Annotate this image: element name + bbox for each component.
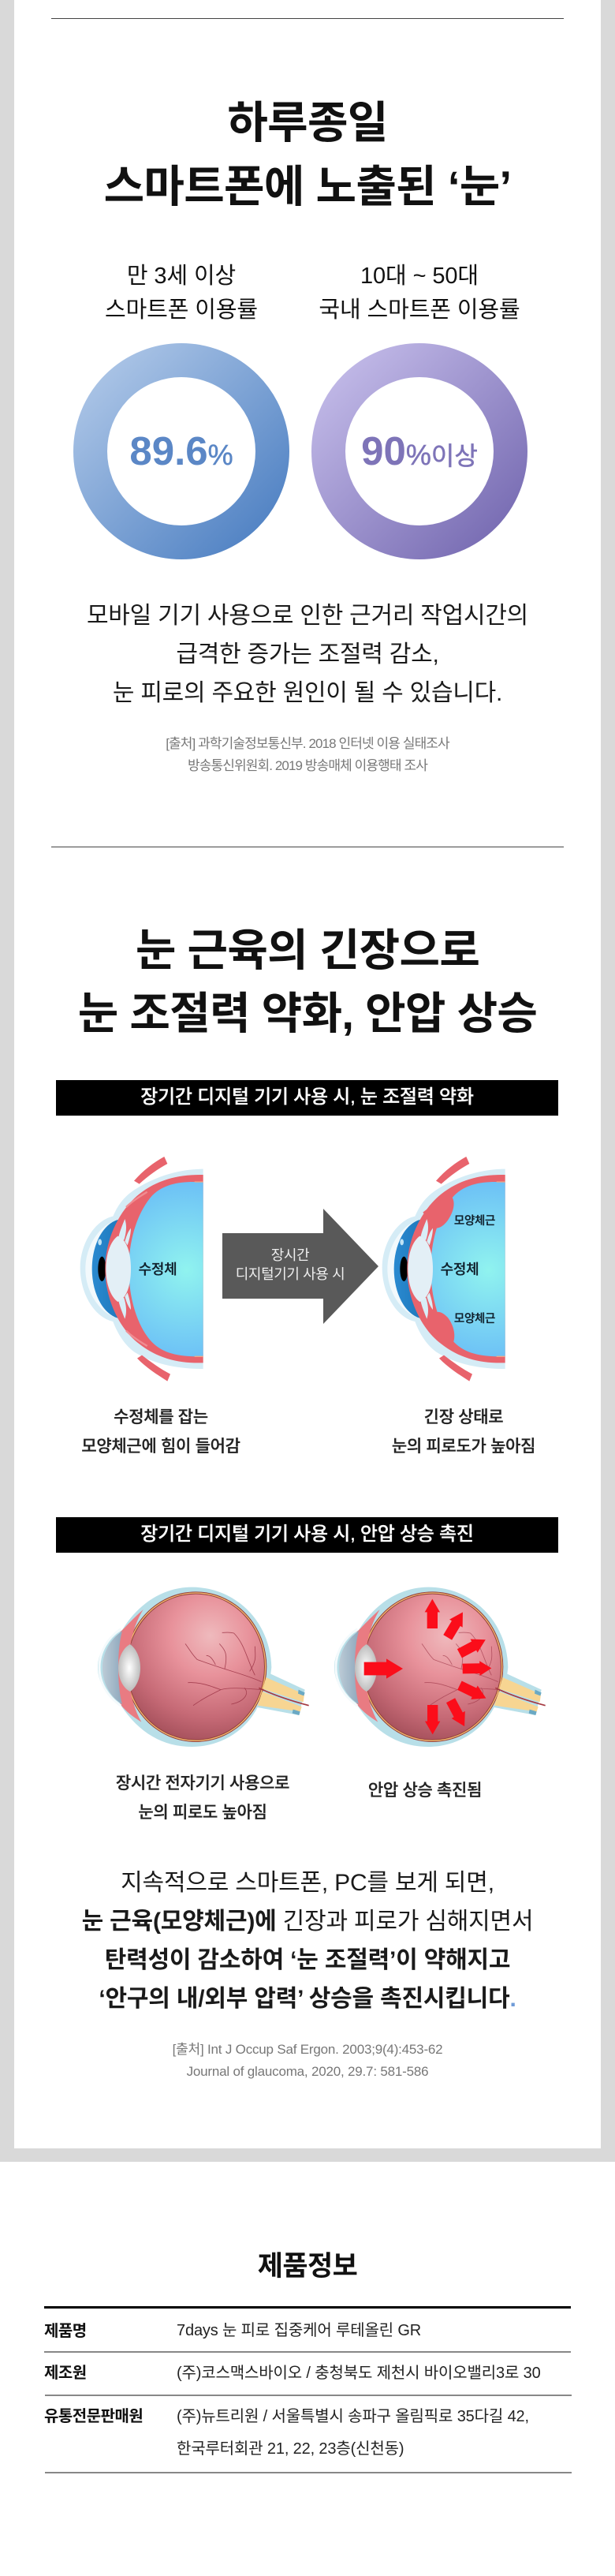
- caption: tension state: 긴장 상태로: [424, 1408, 503, 1426]
- stat label: teens to fifties: [319, 264, 520, 323]
- row value: manufacturer: (주)코스맥스바이오 / 충청북도 제천시 바이오밸리3로 30: [177, 2365, 541, 2382]
- row label: manufacturer: 제조원: [44, 2365, 87, 2382]
- title: all-day smartphone exposure: [104, 98, 511, 211]
- white content card: [14, 0, 601, 2148]
- arrow text: 장시간: [271, 1247, 309, 1263]
- caption: fatigue increases: 눈의 피로도 높아짐: [138, 1804, 267, 1822]
- row value: distributor: 한국루터회관 21, 22, 23층(신천동): [177, 2440, 404, 2458]
- caption: ciliary muscle strain: 모양체근에 힘이 들어감: [81, 1438, 240, 1456]
- donut value 90% or more: 90%이상: [361, 428, 478, 473]
- donut value 89.6%: 89.6%: [129, 428, 233, 473]
- stat label: age 3 and older: 스마트폰 이용률: [105, 297, 258, 323]
- source note 1: [출처] 과학기술정보통신부. 2018 인터넷 이용 실태조사: [166, 736, 449, 751]
- source note 2: [출처] Int J Occup Saf Ergon. 2003;9(4):453-62: [173, 2042, 442, 2057]
- paragraph: mobile use and accommodation: 급격한 증가는 조절력 감소,: [176, 641, 439, 667]
- paragraph: mobile use and accommodation: 모바일 기기 사용으로 인한 근거리 작업시간의: [87, 603, 528, 629]
- stat label: age 3 and older: 만 3세 이상: [127, 264, 236, 289]
- arrow: prolonged digital device use: [222, 1209, 378, 1324]
- row value: distributor: [177, 2408, 529, 2458]
- stat label: teens to fifties: 국내 스마트폰 이용률: [319, 297, 520, 323]
- source note 1: 방송통신위원회. 2019 방송매체 이용행태 조사: [188, 758, 427, 773]
- title: all-day smartphone exposure: 하루종일: [227, 98, 388, 148]
- row value: product name: 7days 눈 피로 집중케어 루테올린 GR: [177, 2322, 421, 2339]
- paragraph: continued screen use: 지속적으로 스마트폰, PC를 보게 되면,: [121, 1870, 494, 1896]
- section bar: intraocular pressure: 장기간 디지털 기기 사용 시, 안압 상승 촉진: [140, 1524, 474, 1545]
- title: all-day smartphone exposure: 스마트폰에 노출된 ‘눈’: [104, 162, 511, 211]
- illustration: relaxed eye cross-section: [80, 1157, 203, 1381]
- paragraph: mobile use and accommodation: 눈 피로의 주요한 원인이 될 수 있습니다.: [113, 680, 502, 706]
- row label: product name: 제품명: [44, 2323, 87, 2340]
- label: ciliary muscle bottom: 모양체근: [454, 1313, 495, 1325]
- source note 2: Journal of glaucoma, 2020, 29.7: 581-586: [187, 2064, 428, 2079]
- table: product information: [44, 2306, 572, 2473]
- caption: tension state: [392, 1408, 535, 1456]
- arrow text: [236, 1247, 345, 1282]
- caption: fatigue increases: 장시간 전자기기 사용으로: [116, 1774, 289, 1793]
- arrow text: 디지털기기 사용 시: [236, 1266, 345, 1282]
- caption: ciliary muscle strain: 수정체를 잡는: [114, 1408, 208, 1426]
- section bar: intraocular pressure: [56, 1517, 558, 1553]
- title: eye muscle tension: 눈 근육의 긴장으로: [136, 925, 479, 975]
- stat label: age 3 and older: [105, 264, 258, 323]
- paragraph: continued screen use: ‘안구의 내/외부 압력’ 상승을 촉진시킵니다.: [99, 1986, 516, 2012]
- row value: distributor: (주)뉴트리원 / 서울특별시 송파구 올림픽로 35다길 42,: [177, 2408, 529, 2425]
- donut: 90 percent or more: [311, 343, 527, 559]
- label: ciliary muscle top: 모양체근: [454, 1215, 495, 1228]
- source note 2: [173, 2042, 442, 2079]
- illustration: strained eye cross-section: [382, 1157, 505, 1381]
- section bar: accommodation weakening: 장기간 디지털 기기 사용 시, 눈 조절력 약화: [140, 1086, 474, 1108]
- label: lens, left: 수정체: [139, 1262, 177, 1277]
- illustration: normal eyeball cross-section: [98, 1587, 309, 1747]
- row label: distributor: 유통전문판매원: [44, 2408, 143, 2425]
- paragraph: continued screen use: 탄력성이 감소하여 ‘눈 조절력’이 약해지고: [105, 1947, 510, 1973]
- title: eye muscle tension: [78, 925, 537, 1038]
- label: lens, right: 수정체: [441, 1262, 479, 1277]
- section bar: accommodation weakening: [56, 1080, 558, 1116]
- donut: 89.6 percent: [73, 343, 289, 559]
- caption: fatigue increases: [116, 1774, 289, 1822]
- title: eye muscle tension: 눈 조절력 약화, 안압 상승: [78, 989, 537, 1038]
- illustration: eyeball with pressure arrows: [334, 1587, 546, 1747]
- paragraph: continued screen use: 눈 근육(모양체근)에 긴장과 피로가 심해지면서: [82, 1909, 533, 1935]
- paragraph: continued screen use: [82, 1870, 533, 2012]
- caption: pressure rise: 안압 상승 촉진됨: [368, 1782, 482, 1800]
- stat label: teens to fifties: 10대 ~ 50대: [360, 264, 479, 289]
- caption: ciliary muscle strain: [81, 1408, 240, 1456]
- caption: tension state: 눈의 피로도가 높아짐: [392, 1438, 535, 1456]
- paragraph: mobile use and accommodation: [87, 603, 528, 706]
- heading: product information: 제품정보: [258, 2251, 357, 2282]
- source note 1: [166, 736, 449, 773]
